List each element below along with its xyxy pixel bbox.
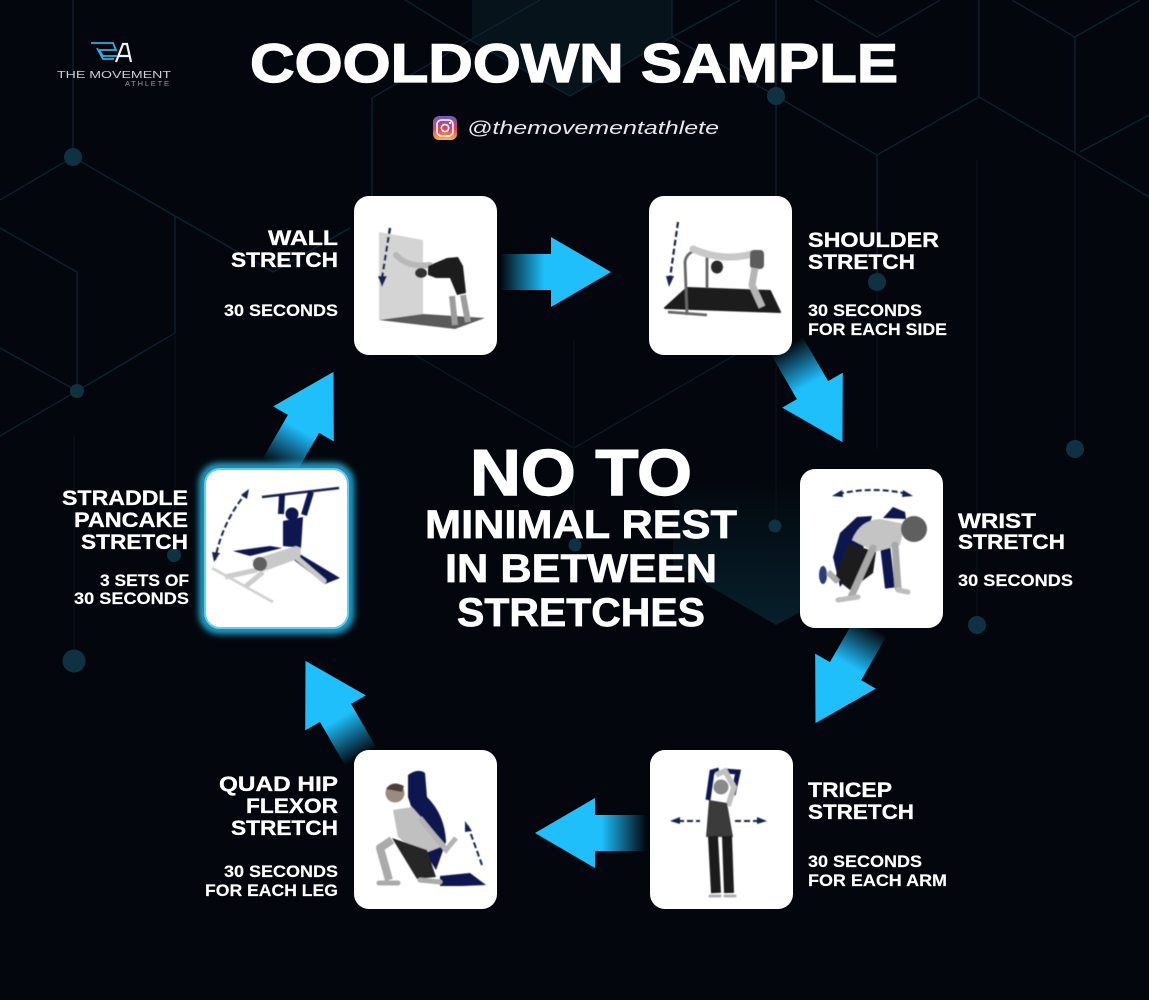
- label: wall stretch: WALL: [268, 227, 338, 250]
- card: shoulder stretch: [649, 196, 792, 355]
- label: shoulder stretch: STRETCH: [808, 251, 915, 274]
- logo: The Movement Athlete: [57, 43, 172, 88]
- card: straddle pancake stretch with glow: [203, 467, 350, 630]
- instagram handle: @themovementathlete: [467, 117, 719, 138]
- label: quad hip flexor stretch: STRETCH: [231, 817, 338, 840]
- label: wrist stretch: [958, 510, 1073, 590]
- label: straddle pancake stretch: 3 SETS OF: [100, 571, 189, 590]
- center message: STRETCHES: [457, 591, 705, 635]
- label: wall stretch: STRETCH: [231, 249, 338, 272]
- label: straddle pancake stretch: PANCAKE: [74, 509, 188, 532]
- card: tricep stretch: [650, 750, 793, 909]
- card: wall stretch: [354, 196, 497, 355]
- label: quad hip flexor stretch: 30 SECONDS: [224, 862, 338, 881]
- arrow: shoulder to wrist: [757, 328, 873, 460]
- label: straddle pancake stretch: STRADDLE: [62, 487, 188, 510]
- label: shoulder stretch: [808, 229, 947, 339]
- center message: NO TO: [470, 436, 692, 509]
- logo: The Movement Athlete: THE MOVEMENT: [57, 69, 172, 81]
- center message: IN BETWEEN: [445, 547, 717, 591]
- label: tricep stretch: FOR EACH ARM: [808, 871, 947, 890]
- label: tricep stretch: 30 SECONDS: [808, 852, 922, 871]
- label: wrist stretch: WRIST: [958, 510, 1036, 533]
- label: shoulder stretch: FOR EACH SIDE: [808, 320, 947, 339]
- label: tricep stretch: [808, 779, 947, 890]
- label: shoulder stretch: SHOULDER: [808, 229, 939, 252]
- label: wrist stretch: STRETCH: [958, 531, 1065, 554]
- card: wrist stretch: [800, 469, 943, 628]
- center message: [425, 436, 737, 635]
- title: COOLDOWN SAMPLE: [250, 32, 898, 94]
- label: quad hip flexor stretch: FLEXOR: [246, 795, 338, 818]
- label: shoulder stretch: 30 SECONDS: [808, 301, 922, 320]
- arrow: straddle to wall: [248, 354, 364, 486]
- label: straddle pancake stretch: 30 SECONDS: [74, 589, 189, 608]
- arrow: quad to straddle: [275, 643, 391, 774]
- instagram handle: [433, 116, 719, 140]
- label: straddle pancake stretch: [62, 487, 189, 608]
- arrow: tricep to quad: [535, 798, 646, 868]
- label: quad hip flexor stretch: FOR EACH LEG: [205, 881, 338, 900]
- label: wall stretch: [224, 227, 338, 320]
- label: quad hip flexor stretch: [205, 773, 338, 900]
- label: straddle pancake stretch: STRETCH: [81, 531, 188, 554]
- card: quad hip flexor stretch: [354, 750, 497, 909]
- logo: The Movement Athlete: ATHLETE: [125, 79, 169, 88]
- label: wrist stretch: 30 SECONDS: [958, 571, 1073, 590]
- arrow: wrist to tricep: [785, 610, 901, 741]
- label: tricep stretch: STRETCH: [808, 801, 914, 824]
- center message: MINIMAL REST: [425, 503, 737, 547]
- label: wall stretch: 30 SECONDS: [224, 301, 338, 320]
- label: quad hip flexor stretch: QUAD HIP: [219, 773, 338, 796]
- arrow: wall to shoulder: [500, 237, 611, 307]
- label: tricep stretch: TRICEP: [808, 779, 892, 802]
